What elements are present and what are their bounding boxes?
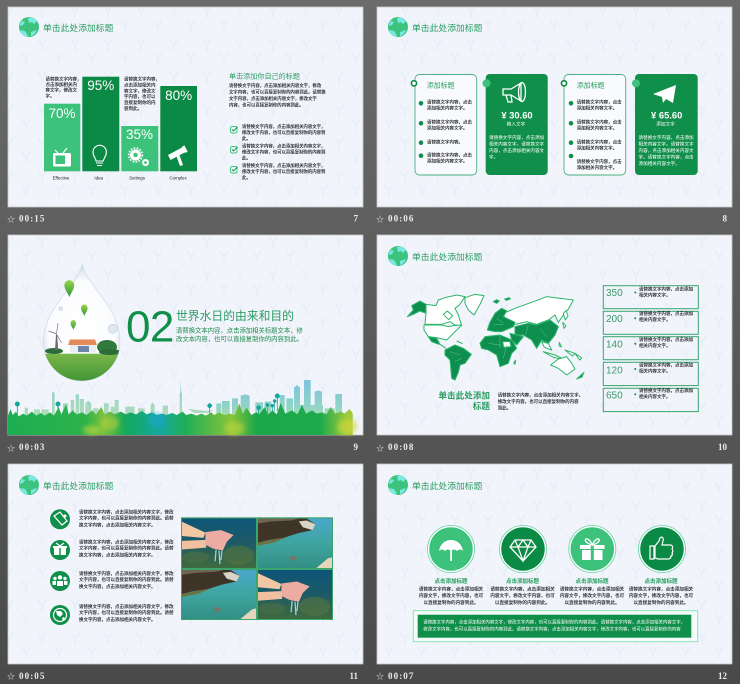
text above bar 3: 直接复制你的内 (124, 99, 156, 106)
card: outline list 1: 添加相关内容文字。 (427, 124, 468, 132)
photo grid (181, 517, 333, 620)
bar labels: Settings (129, 176, 146, 180)
footer: slide 10 timing: ☆ (376, 444, 384, 453)
list text 4: 换文字内容，点击添加相关内容文字。 (79, 616, 156, 623)
panel: slide 8 price cards (377, 7, 732, 207)
caption 4: 以直接复制你的内容到此。 (633, 599, 689, 606)
caption 1: 以直接复制你的内容到此。 (423, 599, 479, 606)
card: outline list 1: 添加标题 (427, 81, 455, 90)
text above bar 3: 容到此。 (124, 105, 142, 112)
icon: tag (50, 509, 70, 529)
stat boxes: 120 (606, 365, 623, 376)
text above bar 3: 容文字，修改文 (124, 87, 156, 94)
card: outline list 1: 请替换文字内容。 (427, 138, 463, 146)
icon: gift box (569, 526, 616, 572)
list text 3: 换文字内容，点击添加相关内容文字。 (79, 583, 156, 590)
caption 2 (490, 577, 555, 606)
map caption heading: 标题 (473, 400, 490, 411)
checklist: 修改文字内容，也可以直接复制你的内容到 (242, 129, 325, 136)
map caption text: 到此。 (498, 404, 511, 412)
icon: paper plane (653, 85, 676, 103)
green text banner: 请替换文字内容，点击添加相关内容文字，修改文字内容，也可以直接复制你的内容到此。请替换文字内容，点击添加相关内容文字， (423, 618, 685, 626)
card: green price 30.60: 内容，点击添加相关内容文 (489, 147, 545, 154)
card: outline list 2: 添加相关内容文字。 (577, 164, 617, 171)
list text 1: 换文字内容，点击添加相关内容文字。 (79, 522, 156, 529)
card: outline list 2: 请替换文字内容，点击 (577, 159, 622, 164)
footer: slide 11 timing: 11 (349, 671, 358, 681)
footer: slide 12 timing (376, 671, 728, 681)
card: green price 65.60: 请替换文字内容，点击添加 (638, 135, 694, 140)
list text 3: 文字内容，也可以直接复制你的内容到此。请替 (79, 576, 174, 583)
water drop with house (40, 264, 124, 384)
heading: 单击此处添加标题 (412, 22, 483, 33)
card: outline list 2: 添加相关内容文字。 (577, 144, 617, 152)
list text 1: 文字内容，也可以直接复制你的内容到此。请替 (79, 515, 174, 522)
icon: megaphone (503, 82, 526, 102)
caption 1 (419, 577, 484, 606)
text above bar 1: 字。 (46, 92, 54, 98)
icon: globe logo (19, 17, 39, 37)
panel: slide 11 icon list and photos (8, 464, 363, 664)
footer: slide 8 timing (376, 214, 728, 224)
list text 2: 换文字内容，点击添加相关内容文字。 (79, 552, 156, 559)
stat boxes: 140 (606, 340, 623, 351)
checklist: 请替换文字内容，点击添加相关内容文字， (242, 163, 325, 168)
icon: gears (129, 148, 149, 166)
card: green price 65.60: 添加相关内容文字。 (638, 160, 680, 167)
bar chart (44, 77, 197, 171)
checklist (230, 123, 325, 181)
stat boxes: 相关内容文字。 (639, 292, 670, 298)
icon: globe (50, 605, 70, 625)
caption 2: 以直接复制你的内容到此。 (495, 599, 550, 606)
card: outline list 2 (561, 74, 626, 175)
checklist: 修改文字内容，也可以直接复制你的内容到 (242, 148, 325, 156)
footer: slide 8 timing: ☆ (376, 215, 384, 224)
card: outline list 1: 添加相关内容文字。 (427, 104, 468, 112)
stat boxes: 请替换文字内容，点击添加 (639, 362, 693, 368)
footer: slide 7 timing: ☆ (7, 215, 15, 224)
footer: slide 12 timing: 00:07 (388, 671, 414, 681)
card: green price 30.60 (482, 74, 548, 175)
card: green price 65.60: ¥ 65.60 (651, 110, 682, 121)
stat boxes (603, 286, 698, 412)
checklist: 此。 (242, 135, 251, 142)
card: outline list 2: 请替换文字内容，点击 (577, 100, 622, 104)
section number: 02 (126, 303, 174, 352)
watercolor spots (83, 413, 357, 435)
section text: 清替换文本内容，点击添加相关标题文本，修 (176, 328, 303, 334)
footer: slide 9 timing (7, 442, 358, 453)
stat boxes: 请替换文字内容，点击添加 (639, 337, 693, 342)
icon: light bulb (93, 145, 106, 166)
card: outline list 1 (411, 74, 477, 175)
card: outline list 2: 请替换文字内容，点击 (577, 140, 622, 144)
map caption text: 请替换文字内容，点击添加相关内容文字， (498, 392, 583, 398)
text above bar 1: 容文字，修改文 (46, 87, 77, 94)
city skyline and grass (8, 379, 357, 435)
card: green price 65.60: 字。请替换文字内容，点击 (638, 154, 694, 160)
text above bar 1: 请替换文字内容， (46, 76, 82, 82)
panel: slide 7 bar chart (8, 7, 363, 207)
stat boxes: 请替换文字内容，点击添加 (639, 311, 693, 316)
caption 3: 点击添加标题 (575, 577, 609, 585)
heading: 单击此处添加标题 (43, 22, 114, 33)
icon: gift (50, 540, 70, 560)
list text 4: 文字内容，也可以直接复制你的内容到此。请替 (79, 609, 174, 616)
caption 1: 点击添加标题 (434, 577, 468, 585)
card: outline list 1: 请替换文字内容，点击 (427, 100, 472, 104)
caption 3 (560, 577, 625, 606)
card: outline list 1: 请替换文字内容，点击 (427, 152, 472, 158)
card: green price 30.60: ¥ 30.60 (501, 110, 533, 121)
bar labels: Complex (169, 176, 187, 180)
text above bar 1: 点击添加相关内 (46, 81, 77, 88)
card: green price 65.60: 内容，点击添加相关内容文 (638, 147, 694, 154)
checklist: 请替换文字内容，点击添加相关内容文字， (242, 124, 325, 129)
icon: diamond (500, 526, 546, 572)
right skyline (216, 380, 342, 417)
bar chart: 80% (165, 88, 192, 103)
stat boxes: 请替换文字内容，点击添加 (639, 388, 693, 393)
card: green price 65.60 (632, 74, 698, 175)
icon: globe logo (19, 475, 39, 495)
list text 3: 请替换文字内容，点击添加相关内容文字，修改 (79, 571, 174, 576)
left skyline (25, 379, 215, 417)
icon: telescope (168, 145, 188, 166)
panel: slide 12 four circles (377, 464, 732, 664)
panel: slide 10 world map (377, 235, 732, 435)
footer: slide 9 timing: ☆ (7, 444, 15, 453)
bar chart: 70% (48, 106, 76, 121)
bar chart: 35% (126, 127, 153, 142)
card: outline list 2: 添加相关内容文字。 (577, 124, 617, 132)
stat boxes: 相关内容文字。 (639, 393, 670, 400)
list text 2: 文字内容，也可以直接复制你的内容到此。请替 (79, 545, 174, 552)
right paragraph: 请替换文字内容，点击添加相关内容文字，修改 (229, 83, 321, 88)
caption 2: 内容文字，修改文字内容，也可 (490, 592, 555, 599)
footer: slide 11 timing (7, 671, 358, 681)
caption 4: 请替换文字内容，点击添加相关 (629, 586, 693, 592)
caption 3: 请替换文字内容，点击添加相关 (560, 586, 624, 592)
stat boxes: 相关内容文字。 (639, 316, 670, 323)
caption 3: 内容文字，修改文字内容，也可 (560, 592, 625, 599)
caption 4: 点击添加标题 (644, 577, 678, 585)
footer: slide 8 timing: 00:06 (388, 214, 414, 224)
card: green price 30.60: 植入文字 (507, 120, 526, 128)
footer: slide 7 timing: 00:15 (19, 214, 46, 224)
footer: slide 9 timing: 9 (354, 442, 358, 452)
grass mass (8, 403, 353, 435)
section text: 改文本内容，也可以直接复制你的内容到此。 (176, 334, 303, 343)
section title: 世界水日的由来和目的 (176, 309, 294, 323)
footer: slide 10 timing: 10 (718, 442, 728, 452)
bar labels (53, 176, 187, 180)
footer: slide 10 timing: 00:08 (388, 442, 414, 452)
bar labels: Idea (94, 176, 104, 180)
right paragraph: 文字内容，点击添加相关内容文字，修改文字 (229, 95, 317, 102)
card: outline list 2: 请替换文字内容，点击 (577, 120, 622, 124)
card: outline list 1: 请替换文字内容，点击 (427, 120, 472, 124)
caption 2: 请替换文字内容，点击添加相关 (490, 586, 555, 592)
checklist: 请替换文字内容，点击添加相关内容文字， (242, 144, 325, 148)
card: outline list 2: 添加标题 (577, 81, 605, 90)
card: outline list 2: 添加相关内容文字。 (577, 104, 617, 112)
icon: globe logo (388, 17, 408, 37)
list text 2: 请替换文字内容，点击添加相关内容文字，修改 (79, 540, 174, 544)
footer: slide 11 timing: ☆ (7, 672, 15, 681)
footer: slide 11 timing: 00:05 (19, 671, 46, 681)
checklist: 此。 (242, 174, 251, 181)
icon: umbrella (428, 526, 474, 572)
checklist: 修改文字内容，也可以直接复制你的内容到 (242, 168, 325, 175)
map caption text: 修改文字内容，也可以直接复制你的内容 (498, 398, 579, 405)
footer: slide 9 timing: 00:03 (19, 442, 46, 452)
heading: 单击此处添加标题 (412, 480, 483, 491)
bar labels: Effective (53, 176, 70, 180)
palm trees (15, 394, 280, 417)
right paragraph: 内容，也可以直接复制你的内容到此。 (229, 102, 304, 108)
world map (407, 294, 584, 380)
footer: slide 7 timing: 7 (354, 214, 358, 224)
icon: globe logo (388, 246, 408, 266)
text above bar 3: 请替换文字内容， (124, 76, 160, 82)
heading: 单击此处添加标题 (412, 251, 483, 262)
panel: slide 9 section cover (8, 235, 363, 435)
card: green price 30.60: 请替换文字内容，点击添加 (489, 135, 544, 140)
stat boxes: 650 (606, 390, 623, 401)
card: green price 30.60: 字。 (489, 154, 498, 160)
stat boxes: 请替换文字内容，点击添加 (639, 286, 693, 292)
bar chart: 95% (87, 78, 114, 93)
card: green price 65.60: 添加文字 (656, 120, 675, 128)
stat boxes: 相关内容文字。 (639, 368, 670, 374)
icon: globe logo (388, 475, 408, 495)
stat boxes: 相关内容文字。 (639, 342, 670, 349)
footer: slide 7 timing (7, 214, 358, 224)
list text 1: 请替换文字内容，点击添加相关内容文字，修改 (79, 510, 174, 514)
caption 1: 请替换文字内容，点击添加相关 (419, 586, 483, 592)
stat boxes: 350 (606, 288, 623, 299)
right heading: 单击添加你自己的标题 (229, 72, 300, 80)
green text banner: 修改文字内容，也可以直接复制你的内容到此。请替换文字内容，点击添加相关内容文字，修改文字内容，也可以直接复制你的内容 (423, 626, 681, 632)
icon: television (53, 148, 71, 166)
right paragraph: 文字内容，也可以直接复制你的内容到此。请替换 (229, 88, 326, 96)
caption 3: 以直接复制你的内容到此。 (564, 599, 620, 606)
card: green price 65.60: 相关内容文字。请替换文字 (638, 140, 694, 148)
caption 1: 内容文字，修改文字内容，也可 (419, 592, 484, 599)
green text banner (413, 611, 698, 642)
caption 2: 点击添加标题 (506, 577, 539, 585)
map caption heading: 单击此处添加 (438, 390, 490, 400)
footer: slide 12 timing: 12 (718, 671, 728, 681)
footer: slide 12 timing: ☆ (376, 672, 384, 681)
heading: 单击此处添加标题 (43, 480, 114, 491)
stat boxes: 200 (606, 314, 623, 325)
checklist: 此。 (242, 154, 251, 162)
text above bar 3: 点击添加相关内 (124, 81, 156, 88)
caption 4 (629, 577, 694, 606)
icon: people (50, 571, 70, 591)
text above bar 3: 字内容，也可以 (124, 93, 156, 100)
list text 4: 请替换文字内容，点击添加相关内容文字，修改 (79, 604, 174, 609)
footer: slide 10 timing (376, 442, 728, 453)
caption 4: 内容文字，修改文字内容，也可 (629, 592, 694, 599)
icon: thumbs up (638, 526, 686, 572)
footer: slide 8 timing: 8 (722, 214, 728, 224)
card: outline list 1: 添加相关内容文字。 (427, 158, 468, 164)
card: green price 30.60: 相关内容文字。请替换文字 (489, 140, 545, 148)
